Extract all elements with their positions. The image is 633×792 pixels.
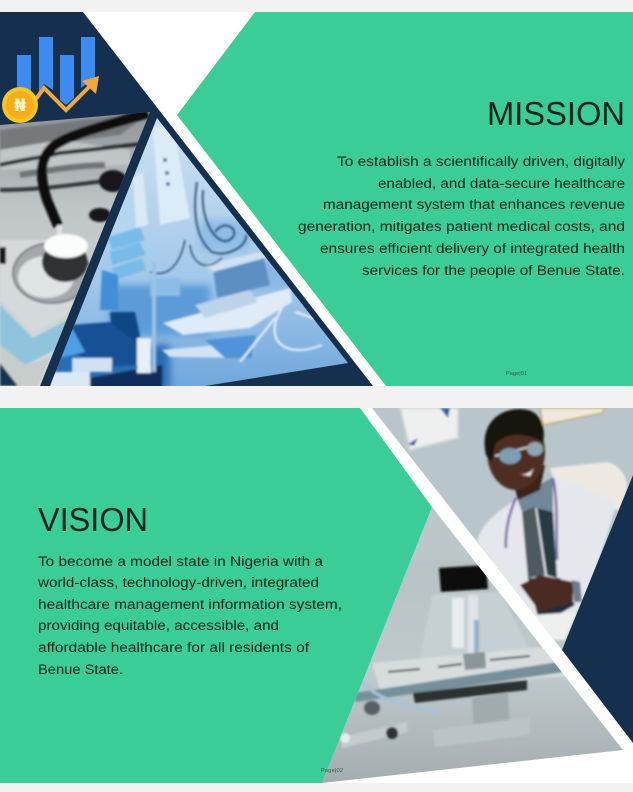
mission text: ensures efficient delivery of integrated health — [320, 241, 625, 257]
icon: naira growth chart — [2, 37, 99, 123]
vision text: Benue State. — [38, 662, 123, 678]
vision text: world-class, technology-driven, integrated — [37, 575, 319, 591]
green vision panel — [0, 408, 432, 783]
mission text: enabled, and data-secure healthcare — [378, 176, 625, 192]
icon: naira growth chart: ₦ — [14, 96, 26, 116]
panel: mission slide — [0, 12, 633, 390]
mission text: generation, mitigates patient medical costs, and — [298, 219, 625, 235]
vision text: To become a model state in Nigeria with a — [38, 554, 323, 570]
vision text — [37, 554, 342, 678]
mission heading: MISSION — [487, 95, 625, 132]
vision heading: VISION — [38, 501, 148, 538]
vision text: affordable healthcare for all residents of — [38, 640, 309, 656]
mission text — [298, 154, 626, 279]
mission text: services for the people of Benue State. — [362, 263, 625, 279]
navy triangle background — [0, 12, 373, 386]
panel: vision slide — [0, 405, 633, 785]
mission text: management system that enhances revenue — [323, 197, 625, 213]
photo: medical equipment — [40, 115, 360, 390]
mission text: To establish a scientifically driven, digitally — [337, 154, 626, 170]
vision text: healthcare management information system, — [38, 597, 342, 613]
page number 01: Page|01 — [506, 371, 527, 377]
green mission panel — [177, 12, 633, 386]
photo: operating table — [320, 500, 630, 785]
vision text: providing equitable, accessible, and — [38, 618, 279, 634]
navy corner panel — [562, 475, 633, 743]
photo: stethoscope — [0, 110, 160, 386]
photo: doctor — [370, 405, 633, 655]
page number 02: Page|02 — [321, 768, 343, 774]
